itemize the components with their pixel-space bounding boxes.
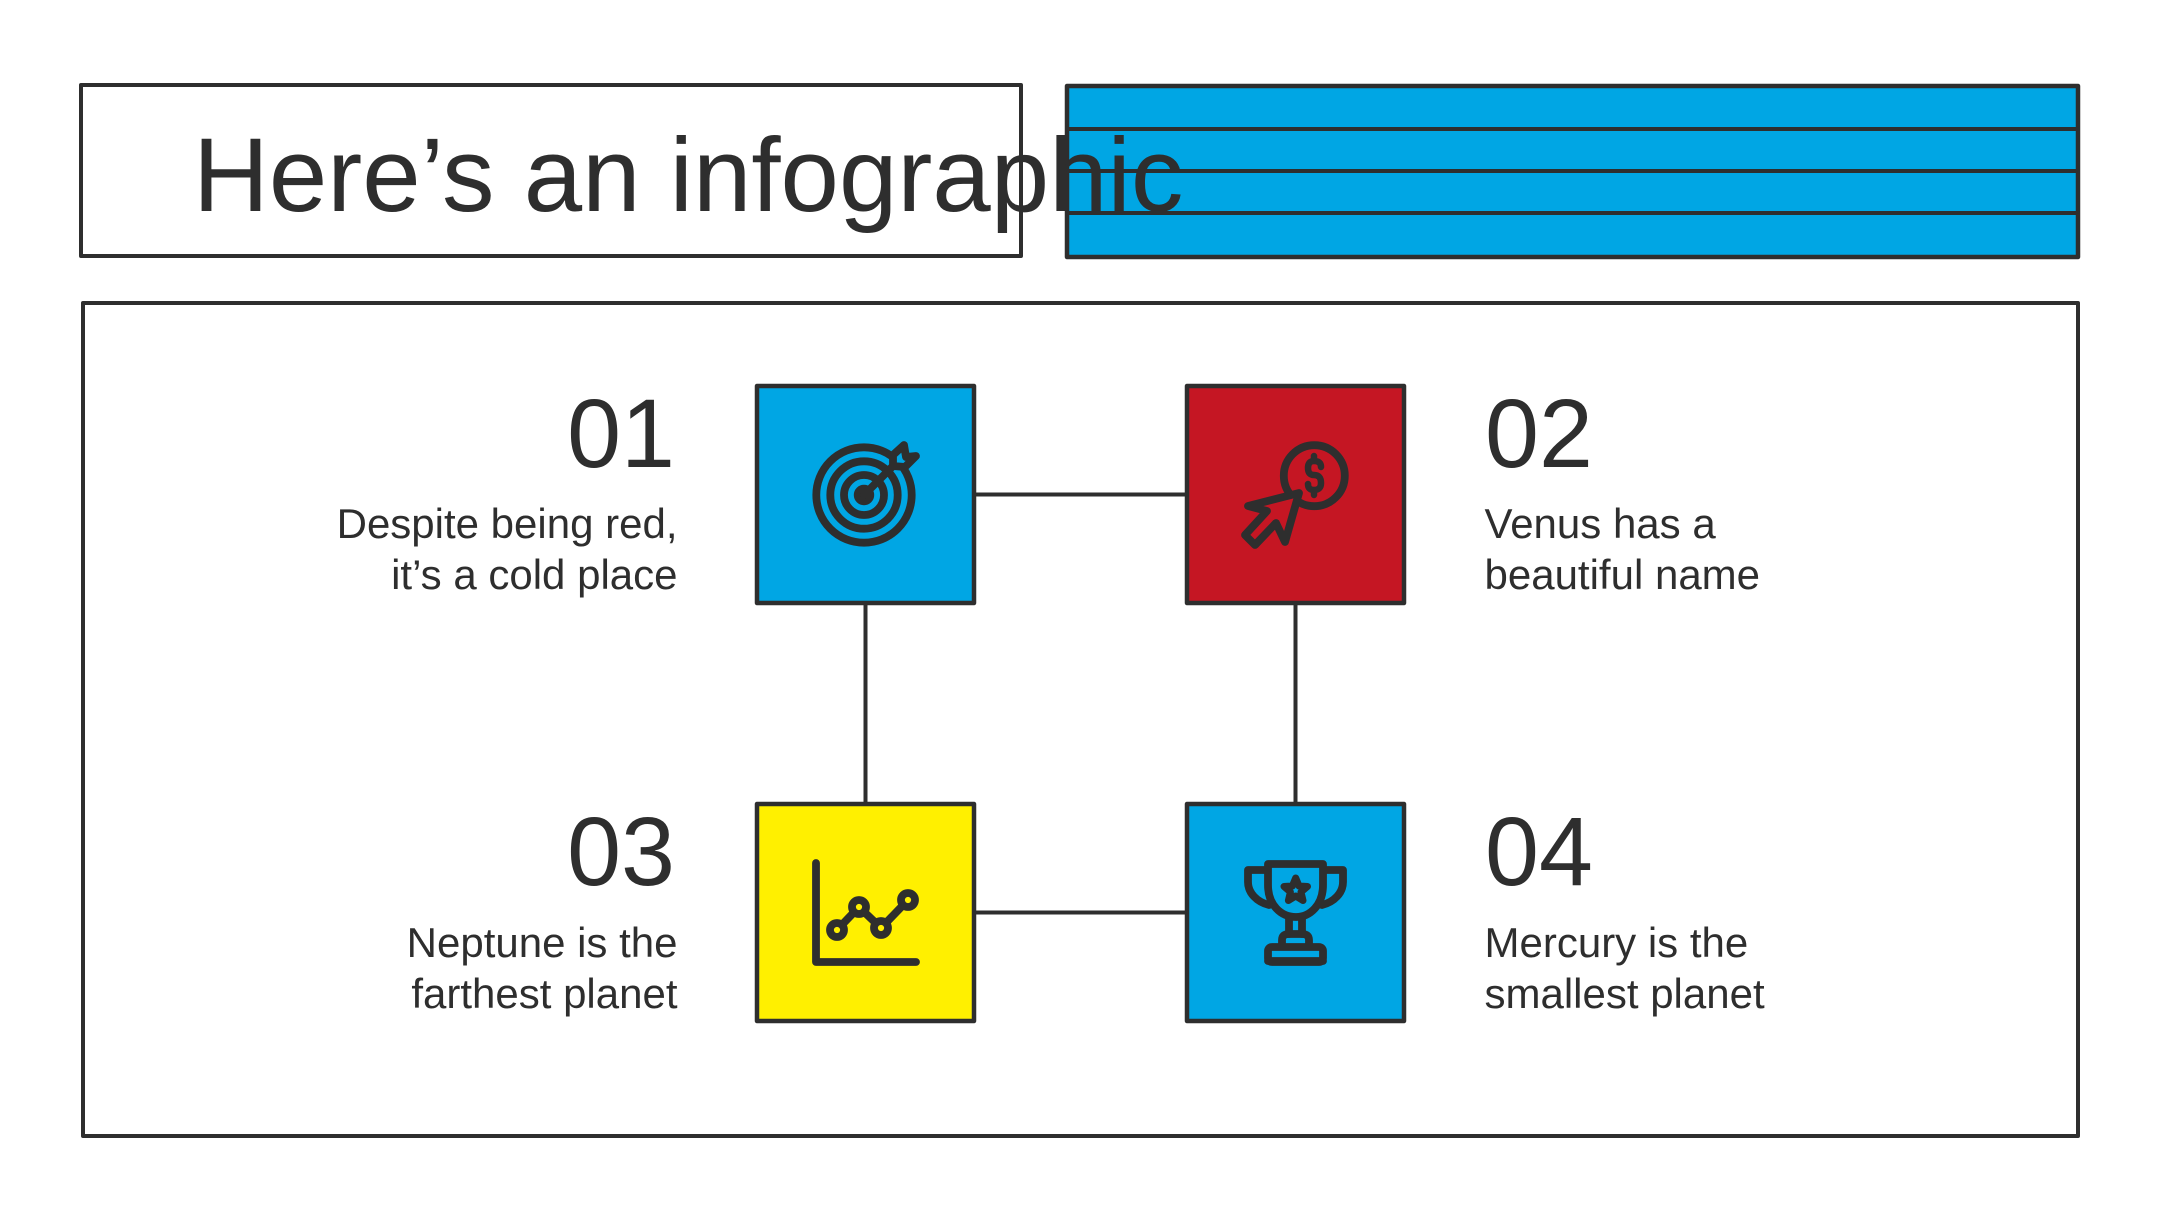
tile: dollar click <box>1187 386 1404 603</box>
number 01: 01 <box>567 379 675 488</box>
item 03 <box>407 797 974 1021</box>
connector lines <box>866 494 1296 912</box>
icon: trophy with star <box>1248 864 1343 962</box>
item 01 <box>337 379 974 603</box>
number 04: 04 <box>1485 797 1593 906</box>
description 02: beautiful name <box>1484 551 1760 598</box>
icon: line chart <box>816 863 916 962</box>
description 02: Venus has a <box>1484 500 1716 547</box>
icon: cursor clicking dollar coin <box>1245 445 1345 545</box>
tile: target <box>757 386 974 603</box>
main panel <box>83 303 2078 1136</box>
number 02: 02 <box>1485 379 1593 488</box>
item 02 <box>1187 379 1760 603</box>
icon: target with arrow <box>816 445 916 543</box>
tile: chart <box>757 804 974 1021</box>
description 04: Mercury is the <box>1484 919 1748 966</box>
tile: trophy <box>1187 804 1404 1021</box>
description 04: smallest planet <box>1484 970 1765 1017</box>
description 01: it’s a cold place <box>391 551 678 598</box>
striped blue banner <box>1067 86 2078 257</box>
number 03: 03 <box>567 797 675 906</box>
description 01: Despite being red, <box>337 500 678 547</box>
description 03: Neptune is the <box>407 919 678 966</box>
item 04 <box>1187 797 1765 1021</box>
description 03: farthest planet <box>411 970 678 1017</box>
title: Here’s an infographic <box>193 117 1183 234</box>
title box <box>81 85 1021 256</box>
